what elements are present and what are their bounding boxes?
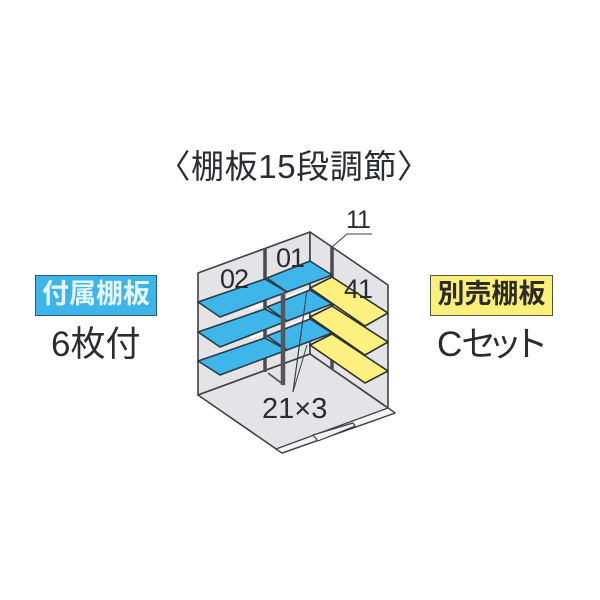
labels: 21×3: [262, 393, 327, 425]
text: C set: Cセット: [437, 325, 539, 364]
blue shelves: [198, 261, 332, 375]
labels: 41: [344, 274, 372, 304]
top shelf: [198, 261, 332, 317]
middle shelf: [198, 290, 332, 347]
centre post over shelves: [281, 293, 285, 385]
badge: included shelves: [35, 275, 157, 316]
title: 〈棚板15段調節〉: [157, 148, 431, 185]
labels: [220, 206, 372, 425]
wall and centre posts: [265, 247, 332, 385]
bottom shelf: [198, 319, 332, 375]
labels: 11: [346, 206, 370, 234]
badge: separately sold shelves: 別売棚板: [438, 279, 546, 309]
yellow shelves: [310, 277, 388, 383]
labels: 02: [220, 264, 248, 294]
walls and floor: [198, 232, 395, 453]
badge: included shelves: 付属棚板: [42, 279, 150, 309]
badge: separately sold shelves: [430, 275, 553, 316]
leader lines: [293, 234, 372, 392]
rails behind shelves: [250, 290, 308, 337]
labels: 01: [276, 243, 304, 273]
text: six shelves included: 6枚付: [51, 325, 140, 364]
